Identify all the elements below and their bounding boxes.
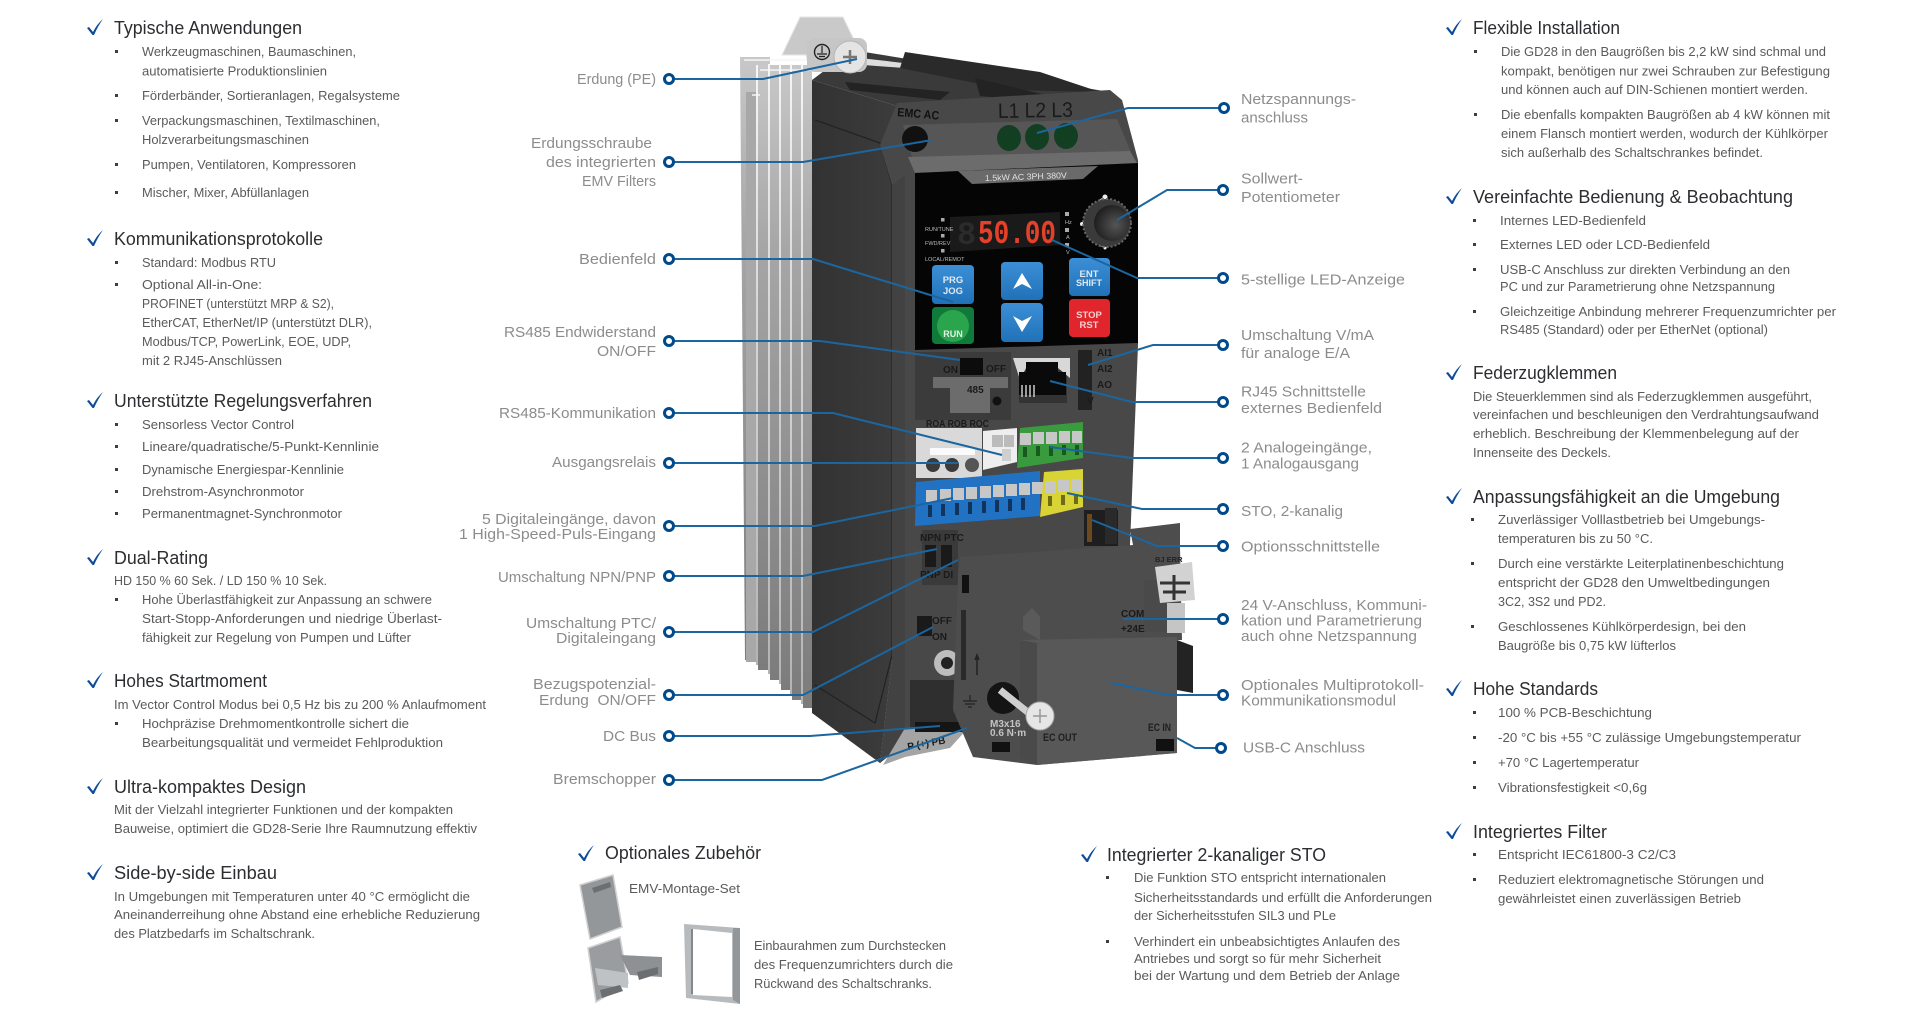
line: Erdungsschraube <box>673 140 932 162</box>
text block: vereinfachen und beschleunigen den Verdrahtungsaufwand <box>1473 407 1819 422</box>
heading: Flexible Installation <box>1473 18 1620 38</box>
panel: Dual-Rating <box>87 548 442 645</box>
callout labels: right: anschluss <box>1241 110 1308 127</box>
icon: check <box>87 19 103 35</box>
heading: Integrierter 2-kanaliger STO <box>1107 845 1326 865</box>
callout labels: right: 1 Analogausgang <box>1241 456 1359 472</box>
line: Bezugspotenzial-Erdung <box>673 627 933 695</box>
line: Bremschopper <box>673 728 967 780</box>
panel: product device illustration <box>740 17 1195 765</box>
list: Geschlossenes Kühlkörperdesign, bei den <box>1498 619 1746 634</box>
list: Verhindert ein unbeabsichtigtes Anlaufen des <box>1134 934 1400 949</box>
callout labels: right: Sollwert- <box>1241 170 1303 187</box>
list: Lineare/quadratische/5-Punkt-Kennlinie <box>142 439 379 454</box>
list: sich außerhalb des Schaltschrankes befindet. <box>1501 145 1763 160</box>
panel: Integrierter 2-kanaliger STO <box>1081 845 1432 983</box>
earth screw with PE symbol <box>807 38 867 73</box>
line: Analogeingänge <box>1050 447 1219 458</box>
list: Verpackungsmaschinen, Textilmaschinen, <box>142 113 380 128</box>
heading: Integriertes Filter <box>1473 822 1607 842</box>
list: PC und zur Parametrierung ohne Netzspannung <box>1500 279 1775 294</box>
DC bus screw holes <box>907 722 970 753</box>
list: RS485 (Standard) oder per EtherNet (optional) <box>1500 322 1768 337</box>
icon: check <box>1446 188 1462 204</box>
list: Antriebes und sorgt so für mehr Sicherheit <box>1134 951 1381 966</box>
callout labels: right: USB-C Anschluss <box>1243 740 1365 756</box>
list: automatisierte Produktionslinien <box>142 64 327 78</box>
list: Permanentmagnet-Synchronmotor <box>142 506 343 521</box>
button: STOP RST <box>1069 299 1110 337</box>
text block: In Umgebungen mit Temperaturen unter 40 °C ermöglicht die <box>114 889 470 904</box>
line: LED-Anzeige <box>1052 240 1219 278</box>
list: kompakt, benötigen nur zwei Schrauben zur Befestigung <box>1501 64 1830 78</box>
text block <box>114 697 486 750</box>
status indicators: A <box>1066 235 1070 241</box>
callout labels: left: ON/OFF <box>597 343 656 360</box>
list: Internes LED-Bedienfeld <box>1500 213 1646 228</box>
DC bus screw holes: P (+) PB <box>907 735 946 753</box>
panel: Flexible Installation <box>1446 18 1830 160</box>
button: up arrow <box>1001 262 1043 300</box>
panel: Optionales Zubehör <box>578 843 953 1004</box>
list: -20 °C bis +55 °C zulässige Umgebungstemperatur <box>1498 730 1802 745</box>
callout labels: right: externes Bedienfeld <box>1241 400 1382 417</box>
line: Bedienfeld <box>673 259 953 302</box>
rating plate: 1.5kW AC 3PH 380V <box>985 170 1067 183</box>
callout labels: right: 2 Analogeingänge, <box>1241 440 1372 457</box>
callout labels: right: auch ohne Netzspannung <box>1241 628 1417 645</box>
button: ENT SHIFT: ENT <box>1080 269 1099 280</box>
text block: des Platzbedarfs im Schaltschrank. <box>114 926 315 941</box>
line: Umschaltung V/mA <box>1088 345 1219 365</box>
DC bus connector strip <box>883 728 968 765</box>
line: Optionsschnittstelle <box>1092 520 1219 546</box>
callout labels: right: 24 V-Anschluss, Kommuni- <box>1241 597 1427 614</box>
grounding switch and earth screw: OFF <box>932 616 952 627</box>
list <box>1471 512 1784 653</box>
heading: Typische Anwendungen <box>114 18 302 38</box>
callout labels: left: Bezugspotenzial- <box>533 676 656 693</box>
list: Werkzeugmaschinen, Baumaschinen, <box>142 44 356 59</box>
top vent surface <box>812 50 1122 106</box>
analog switches AI1 AI2 AO: V <box>1087 396 1094 407</box>
button: PRG JOG: PRG <box>943 275 963 286</box>
RS485 switch and connector block: ON <box>943 365 958 376</box>
text block: erheblich. Beschreibung der Klemmenbelegung auf der <box>1473 426 1800 441</box>
list: Durch eine verstärkte Leiterplatinenbeschichtung <box>1498 556 1784 571</box>
button: ENT SHIFT: SHIFT <box>1076 278 1103 288</box>
text block: Aneinanderreihung ohne Abstand eine erhebliche Reduzierung <box>114 907 480 922</box>
optional communication module: BJ ERR <box>1155 555 1183 564</box>
panel: Hohe Standards <box>1446 679 1802 795</box>
list: bei der Wartung und dem Betrieb der Anlage <box>1134 968 1400 983</box>
callout labels: left: Umschaltung NPN/PNP <box>498 569 656 586</box>
NPN PTC switches: NPN PTC <box>920 533 964 544</box>
icon: check <box>1446 680 1462 696</box>
panel: Federzugklemmen <box>1446 363 1819 460</box>
rating plate <box>958 166 1098 184</box>
line: Digitaleingänge <box>673 498 953 526</box>
callout labels: right: Kommunikationsmodul <box>1241 692 1396 710</box>
L1 L2 L3 terminal recess: EMC AC <box>897 105 940 123</box>
text block: Bauweise, optimiert die GD28-Serie Ihre Raumnutzung effektiv <box>114 821 477 836</box>
text block: Mit der Vielzahl integrierter Funktionen und der kompakten <box>114 802 453 817</box>
text block: Die Steuerklemmen sind als Federzugklemmen ausgeführt, <box>1473 389 1812 404</box>
list: einem Flansch montiert werden, wodurch der Kühlkörper <box>1501 126 1829 141</box>
callout labels: right: STO, 2-kanalig <box>1241 503 1343 520</box>
callout labels: right: Netzspannungs- <box>1241 91 1356 108</box>
line: 24 V-Anschluss <box>1123 618 1219 620</box>
callout labels: left: Digitaleingang <box>556 630 656 647</box>
LED display showing 50.00: 50.00 <box>978 216 1056 253</box>
callout labels: left: RS485 Endwiderstand <box>504 324 656 341</box>
callout labels: left: Ausgangsrelais <box>552 454 656 471</box>
line: RJ45 <box>1050 381 1219 402</box>
list: 3C2, 3S2 und PD2. <box>1498 594 1606 609</box>
list: Drehstrom-Asynchronmotor <box>142 484 305 499</box>
list: Entspricht IEC61800-3 C2/C3 <box>1498 847 1676 862</box>
list: Vibrationsfestigkeit <0,6g <box>1498 780 1647 795</box>
sloped terminal face <box>880 90 1138 763</box>
panel: Unterstützte Regelungsverfahren <box>87 391 379 521</box>
text block <box>114 802 477 836</box>
icon: mounting frame <box>684 924 740 1004</box>
text block: Hochpräzise Drehmomentkontrolle sichert die <box>142 716 409 731</box>
list: der Sicherheitsstufen SIL3 und PLe <box>1134 908 1336 923</box>
status indicators: FWD/REV <box>925 241 951 247</box>
icon: check <box>578 845 594 861</box>
list: und können auch auf DIN-Schienen montiert werden. <box>1501 82 1808 97</box>
text block <box>1473 389 1819 460</box>
RS485 switch and connector block: 485 <box>967 385 984 396</box>
L1 L2 L3 terminal recess: L1 L2 L3 <box>998 99 1073 123</box>
list: Modbus/TCP, PowerLink, EOE, UDP, <box>142 334 351 349</box>
list: Gleichzeitige Anbindung mehrerer Frequenzumrichter per <box>1500 304 1837 319</box>
left side face <box>812 80 913 763</box>
heading: Hohe Standards <box>1473 679 1598 699</box>
leader lines: left callouts <box>673 59 1002 780</box>
icon: check <box>87 864 103 880</box>
icon: check <box>87 230 103 246</box>
text block: fähigkeit zur Regelung von Pumpen und Lüfter <box>142 630 412 645</box>
callout labels: right: 5-stellige LED-Anzeige <box>1241 271 1405 288</box>
callout labels: left: DC Bus <box>603 728 656 745</box>
heading: Federzugklemmen <box>1473 363 1617 383</box>
button: STOP RST: RST <box>1080 320 1099 331</box>
callout labels: left: Erdungsschraube <box>531 135 652 152</box>
list: Sicherheitsstandards und erfüllt die Anforderungen <box>1134 890 1432 905</box>
list <box>115 44 400 200</box>
callout labels: left: 5 Digitaleingänge, davon <box>482 511 656 528</box>
panel: Ultra-kompaktes Design <box>87 777 477 836</box>
icon: check <box>1446 19 1462 35</box>
list <box>115 417 379 521</box>
list: Externes LED oder LCD-Bedienfeld <box>1500 237 1710 252</box>
NPN PTC switches: PNP DI <box>920 570 953 581</box>
line: USB-C <box>1177 738 1217 748</box>
callout labels: right: kation und Parametrierung <box>1241 613 1422 630</box>
line: Netzspannungsanschluss <box>1037 108 1219 133</box>
optional communication module: 0.6 N·m <box>990 728 1026 739</box>
text block: Hohe Überlastfähigkeit zur Anpassung an schwere <box>142 592 432 607</box>
potentiometer knob <box>1080 194 1131 250</box>
status indicators: V <box>1066 250 1070 256</box>
list <box>115 255 372 368</box>
button: RUN: RUN <box>943 329 963 339</box>
list: Die Funktion STO entspricht internationalen <box>1134 870 1386 885</box>
RS485 switch and connector block: OFF <box>986 364 1006 375</box>
icon: check <box>1446 364 1462 380</box>
panel: Anpassungsfähigkeit an die Umgebung <box>1446 487 1784 653</box>
panel: Side-by-side Einbau <box>87 863 480 941</box>
callout labels: left <box>459 71 657 788</box>
optional communication module <box>953 523 1195 765</box>
text block: HD 150 % 60 Sek. / LD 150 % 10 Sek. <box>114 573 327 588</box>
heading: Optionales Zubehör <box>605 843 761 863</box>
icon: check <box>87 392 103 408</box>
button: RUN <box>932 307 974 344</box>
RJ45 socket <box>1013 358 1070 403</box>
list: USB-C Anschluss zur direkten Verbindung an den <box>1500 262 1790 277</box>
text block <box>114 573 442 645</box>
line: Multiprotokollmodul <box>1112 683 1219 695</box>
analog switches AI1 AI2 AO: AI2 <box>1097 364 1113 375</box>
callout labels: left: EMV Filters <box>582 173 656 190</box>
callout labels: right: Potentiometer <box>1241 189 1340 206</box>
panel: Typische Anwendungen <box>87 18 400 200</box>
list <box>1473 847 1764 906</box>
grounding switch and earth screw: ON <box>932 632 947 643</box>
status indicators: LOCAL/REMOT <box>925 257 965 263</box>
NPN PTC switches <box>920 530 964 585</box>
heading: Dual-Rating <box>114 548 208 568</box>
line: RS485-Kommunikation <box>673 413 1002 455</box>
list: Die GD28 in den Baugrößen bis 2,2 kW sind schmal und <box>1501 44 1826 59</box>
callout labels: right: RJ45 Schnittstelle <box>1241 383 1366 400</box>
line: DC Bus <box>673 726 940 736</box>
button: down arrow <box>1001 303 1043 342</box>
list <box>1473 213 1837 337</box>
callout labels: left: Bremschopper <box>553 771 656 788</box>
green analog terminals <box>1017 422 1083 468</box>
LED display showing 50.00: 8 <box>957 217 976 254</box>
callout labels: left: Bedienfeld <box>579 251 656 268</box>
optional communication module: +24E <box>1121 624 1145 635</box>
callout labels: right: Optionsschnittstelle <box>1241 539 1380 556</box>
list: Sensorless Vector Control <box>142 417 294 432</box>
callout labels: right: für analoge E/A <box>1241 345 1350 362</box>
option interface slot <box>1084 508 1118 546</box>
heading: Ultra-kompaktes Design <box>114 777 306 797</box>
icon: check <box>1081 846 1097 862</box>
text block: Im Vector Control Modus bei 0,5 Hz bis zu 200 % Anlaufmoment <box>114 697 486 712</box>
line: STO <box>1067 493 1219 509</box>
L1 L2 L3 terminal recess <box>897 99 1138 173</box>
heading: Side-by-side Einbau <box>114 863 277 883</box>
list: Reduziert elektromagnetische Störungen und <box>1498 872 1764 887</box>
LED display showing 50.00 <box>950 212 1060 254</box>
status indicators: Hz <box>1065 220 1072 226</box>
icon: EMC mounting bracket <box>588 937 662 1002</box>
list: Standard: Modbus RTU <box>142 255 276 270</box>
line: Erdung (PE) <box>673 59 857 79</box>
icon: check <box>87 672 103 688</box>
text block: Innenseite des Deckels. <box>1473 445 1611 460</box>
list: Mischer, Mixer, Abfüllanlagen <box>142 185 309 200</box>
list: Die ebenfalls kompakten Baugrößen ab 4 kW können mit <box>1501 107 1830 122</box>
icon: check <box>87 549 103 565</box>
list <box>1106 870 1432 983</box>
callout labels: right: Optionales Multiprotokoll- <box>1241 677 1424 694</box>
button: PRG JOG: JOG <box>943 286 963 297</box>
list: mit 2 RJ45-Anschlüssen <box>142 353 282 368</box>
heading: Vereinfachte Bedienung & Beobachtung <box>1473 187 1793 207</box>
label: EMV-Montage-Set: EMV-Montage-Set <box>629 881 740 896</box>
line: RS485 Endwiderstand <box>673 341 960 360</box>
list: Pumpen, Ventilatoren, Kompressoren <box>142 157 356 172</box>
optional communication module: M3x16 <box>990 719 1021 730</box>
grounding switch and earth screw <box>910 616 960 730</box>
optional communication module: EC OUT <box>1043 732 1077 744</box>
list: 100 % PCB-Beschichtung <box>1498 705 1652 720</box>
line: PTC <box>673 560 958 632</box>
relay terminals ROA ROB ROC: ROA ROB ROC <box>926 419 989 430</box>
list: temperaturen bis zu 50 °C. <box>1498 531 1653 546</box>
line: NPN/PNP <box>673 549 937 576</box>
button: PRG JOG <box>932 265 974 304</box>
callout labels: right <box>1241 91 1427 756</box>
callout labels: left: 1 High-Speed-Puls-Eingang <box>459 526 656 543</box>
status indicators <box>925 212 1072 263</box>
text: Einbaurahmen: Einbaurahmen zum Durchstecken <box>754 938 946 953</box>
panel: Vereinfachte Bedienung & Beobachtung <box>1446 187 1837 337</box>
list <box>1473 705 1802 795</box>
list: entspricht der GD28 den Umweltbedingungen <box>1498 575 1770 590</box>
blue digital input terminals <box>915 471 1043 526</box>
panel: Kommunikationsprotokolle <box>87 229 372 368</box>
text: Einbaurahmen: des Frequenzumrichters durch die <box>754 957 953 972</box>
callout labels: left: Erdung (PE) <box>577 71 656 88</box>
callout labels: left: RS485-Kommunikation <box>499 405 656 422</box>
heat sink fins <box>740 57 812 708</box>
heading: Anpassungsfähigkeit an die Umgebung <box>1473 487 1780 507</box>
heading: Unterstützte Regelungsverfahren <box>114 391 372 411</box>
list: +70 °C Lagertemperatur <box>1498 755 1640 770</box>
list: PROFINET (unterstützt MRP & S2), <box>142 296 334 311</box>
callout markers: right <box>1216 104 1228 752</box>
text block <box>114 889 480 941</box>
callout markers: left <box>664 74 674 784</box>
analog switches AI1 AI2 AO: AO <box>1097 380 1112 391</box>
button: STOP RST: STOP <box>1076 310 1103 321</box>
list: Zuverlässiger Volllastbetrieb bei Umgebungs- <box>1498 512 1765 527</box>
analog switches AI1 AI2 AO: AI1 <box>1097 348 1113 359</box>
black control panel <box>915 163 1138 350</box>
list <box>1474 44 1830 160</box>
status indicators: RUN/TUNE <box>925 227 954 233</box>
button: ENT SHIFT <box>1069 258 1110 296</box>
line: Ausgangsrelais <box>673 462 958 464</box>
list: Dynamische Energiespar-Kennlinie <box>142 462 344 477</box>
callout labels: left: Umschaltung PTC/ <box>526 615 657 632</box>
list: Holzverarbeitungsmaschinen <box>142 132 309 147</box>
list: Optional All-in-One: <box>142 277 262 292</box>
optional communication module: COM <box>1121 609 1144 620</box>
RS485 switch and connector block <box>915 352 1011 420</box>
white communication terminal <box>983 428 1017 470</box>
relay terminals ROA ROB ROC <box>916 419 989 478</box>
text: Einbaurahmen <box>754 938 953 991</box>
text block: Bearbeitungsqualität und vermeidet Fehlproduktion <box>142 735 443 750</box>
heading: Hohes Startmoment <box>114 671 267 691</box>
heading: Kommunikationsprotokolle <box>114 229 323 249</box>
list: EtherCAT, EtherNet/IP (unterstützt DLR), <box>142 315 372 330</box>
list: Baugröße bis 0,75 kW lüfterlos <box>1498 638 1676 653</box>
text: Einbaurahmen: Rückwand des Schaltschranks. <box>754 976 932 991</box>
yellow STO terminals <box>1040 469 1083 517</box>
panel: Integriertes Filter <box>1446 822 1764 906</box>
panel: Hohes Startmoment <box>87 671 486 750</box>
icon: EMC mounting plate <box>580 875 622 939</box>
list: Förderbänder, Sortieranlagen, Regalsysteme <box>142 88 400 103</box>
line: Sollwert-Potentiometer <box>1117 190 1219 220</box>
mounting bracket <box>782 17 860 70</box>
callout labels: left: des integrierten <box>546 154 656 171</box>
icon: check <box>87 778 103 794</box>
analog switches AI1 AI2 AO <box>1078 348 1113 410</box>
callout labels: left: Erdung ON/OFF <box>539 692 656 709</box>
icon: check <box>1446 488 1462 504</box>
leader lines: right callouts <box>1037 108 1219 748</box>
text block: Start-Stopp-Anforderungen und niedrige Überlast- <box>142 611 442 626</box>
callout labels: right: Umschaltung V/mA <box>1241 327 1374 344</box>
optional communication module: EC IN <box>1148 722 1171 734</box>
list: gewährleistet einen zuverlässigen Betrieb <box>1498 891 1741 906</box>
icon: check <box>1446 823 1462 839</box>
